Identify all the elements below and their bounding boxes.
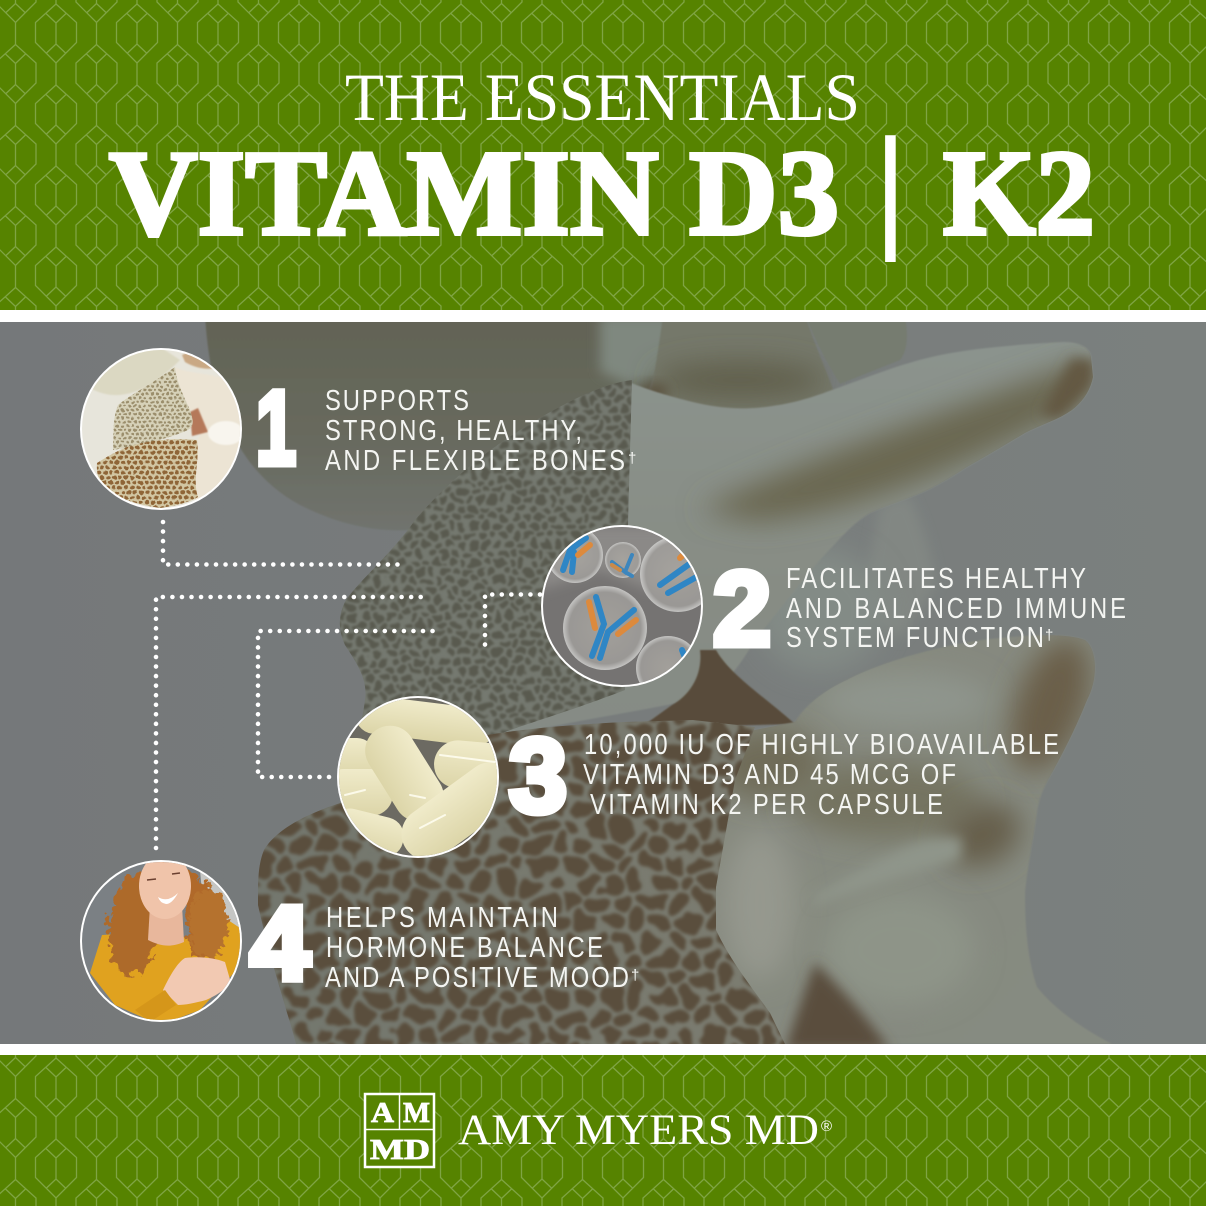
dotted connector: item 2	[485, 594, 540, 651]
text: supports strong healthy and flexible bones: AND FLEXIBLE BONES	[325, 444, 625, 477]
text: facilitates healthy and balanced immune system function	[786, 562, 1126, 654]
text: 10,000 iu d3 and 45 mcg k2 per capsule	[583, 728, 1059, 821]
text: 10,000 iu d3 and 45 mcg k2 per capsule: 10,000 IU OF HIGHLY BIOAVAILABLE	[584, 728, 1059, 761]
logo: am md monogram: A	[371, 1098, 395, 1129]
icon: bone cross-section	[80, 340, 245, 515]
number 3: 3	[509, 718, 567, 835]
footer banner	[0, 1055, 1206, 1206]
item 4: hormones and mood	[79, 853, 639, 1025]
item 1: bones	[80, 340, 636, 515]
item 2: immune system	[540, 525, 1126, 700]
text: supports strong healthy and flexible bones	[325, 384, 636, 477]
logo: wordmark: ®	[821, 1118, 832, 1135]
text: facilitates healthy and balanced immune system function: FACILITATES HEALTHY	[786, 562, 1086, 595]
number 4: 4	[250, 885, 310, 1002]
text: facilitates healthy and balanced immune system function: †	[1045, 627, 1053, 644]
text: facilitates healthy and balanced immune system function: SYSTEM FUNCTION	[786, 621, 1044, 654]
title: divider bar: |	[869, 114, 912, 262]
icon: antibodies in bubbles	[541, 525, 703, 687]
title: vitamin d3: VITAMIN D3	[109, 126, 839, 261]
text: helps maintain hormone balance and a positive mood: HELPS MAINTAIN	[326, 901, 558, 934]
logo: am md monogram: MD	[370, 1135, 430, 1166]
text: supports strong healthy and flexible bones: STRONG, HEALTHY,	[325, 414, 582, 447]
dotted connector: item 1	[163, 522, 403, 564]
header banner	[0, 0, 1206, 310]
text: helps maintain hormone balance and a positive mood: HORMONE BALANCE	[326, 931, 603, 964]
text: helps maintain hormone balance and a positive mood: AND A POSITIVE MOOD	[325, 961, 629, 994]
text: helps maintain hormone balance and a positive mood: †	[631, 967, 639, 984]
icon: smiling woman	[79, 853, 245, 1025]
number 2: 2	[713, 551, 771, 668]
dotted connector: item 4	[156, 597, 423, 848]
title: the essentials: THE ESSENTIALS	[345, 59, 860, 135]
item 3: capsules	[337, 696, 1058, 858]
text: supports strong healthy and flexible bones: †	[628, 450, 636, 467]
text: supports strong healthy and flexible bones: SUPPORTS	[325, 384, 469, 417]
text: helps maintain hormone balance and a positive mood	[325, 901, 639, 994]
background photo: vertebrae	[0, 315, 1206, 1075]
logo: am md monogram: M	[403, 1098, 430, 1129]
dotted connector: item 3	[258, 631, 436, 777]
text: 10,000 iu d3 and 45 mcg k2 per capsule: VITAMIN D3 AND 45 MCG OF	[583, 758, 956, 791]
text: facilitates healthy and balanced immune system function: AND BALANCED IMMUNE	[786, 592, 1126, 625]
logo: am md monogram	[365, 1094, 434, 1167]
title: k2: K2	[943, 126, 1095, 261]
icon: capsules	[337, 696, 499, 858]
text: 10,000 iu d3 and 45 mcg k2 per capsule: VITAMIN K2 PER CAPSULE	[590, 788, 943, 821]
number 1: 1	[256, 370, 296, 487]
logo: wordmark: AMY MYERS MD	[458, 1107, 819, 1154]
